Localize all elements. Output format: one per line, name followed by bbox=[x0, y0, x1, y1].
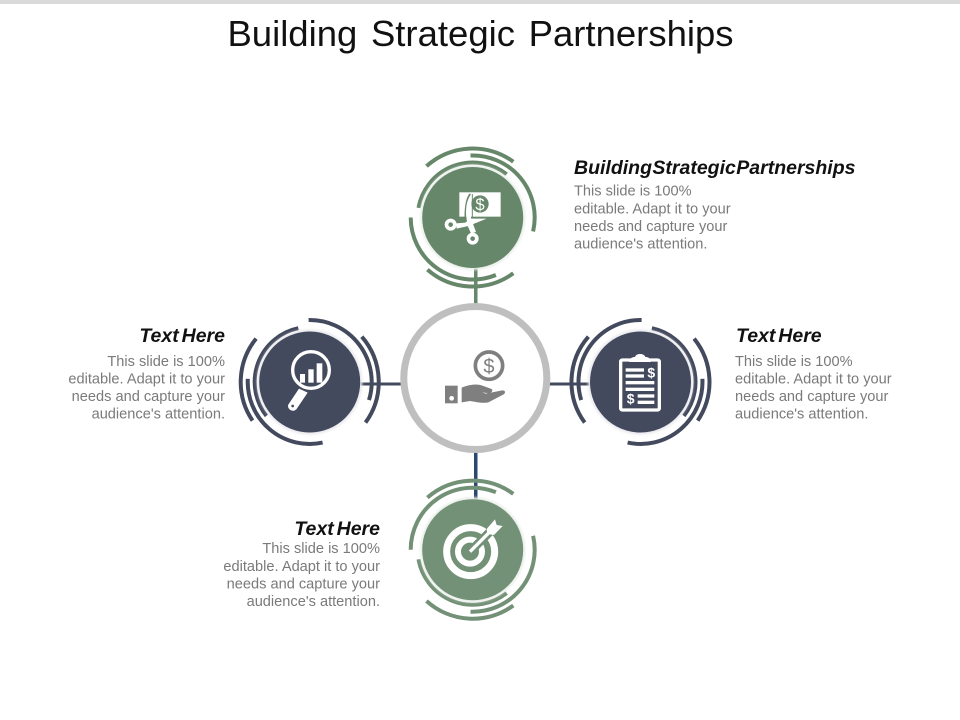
node: right navy bbox=[571, 320, 709, 444]
text block: bottom left: This slide is 100% bbox=[262, 541, 380, 557]
disc bbox=[257, 330, 362, 434]
connector: top bbox=[474, 266, 478, 306]
connector: right bbox=[547, 382, 593, 386]
text block: right: audience's attention. bbox=[735, 406, 868, 422]
arcs bbox=[411, 148, 535, 287]
text block: top right: Building Strategic Partnerships bbox=[574, 157, 856, 179]
text block: bottom left: needs and capture your bbox=[227, 576, 380, 592]
text block: top right bbox=[574, 157, 856, 252]
connector: left bbox=[358, 382, 404, 386]
text block: left: This slide is 100% bbox=[107, 354, 225, 370]
node: top green bbox=[411, 148, 535, 287]
arcs bbox=[241, 320, 379, 444]
text block: left bbox=[68, 325, 225, 422]
disc bbox=[420, 165, 525, 270]
text block: left: Text Here bbox=[139, 325, 225, 347]
top bar bbox=[0, 0, 960, 4]
icon: magnifier with bars bbox=[288, 352, 329, 411]
text block: right: editable. Adapt it to your bbox=[735, 372, 892, 388]
icon: hand holding coin bbox=[445, 352, 505, 403]
icon: clipboard with dollars: $ bbox=[627, 391, 635, 407]
text block: top right: This slide is 100% bbox=[574, 184, 692, 200]
text block: bottom left: editable. Adapt it to your bbox=[223, 559, 380, 575]
icon: clipboard with dollars bbox=[621, 354, 659, 410]
text block: bottom left: audience's attention. bbox=[247, 594, 380, 610]
disc bbox=[588, 330, 693, 434]
disc bbox=[420, 497, 525, 602]
text block: right: Text Here bbox=[736, 325, 822, 347]
text block: left: editable. Adapt it to your bbox=[68, 372, 225, 388]
text block: top right: needs and capture your bbox=[574, 219, 727, 235]
icon: clipboard with dollars: $ bbox=[647, 365, 655, 381]
text block: right: This slide is 100% bbox=[735, 354, 853, 370]
text block: bottom left: Text Here bbox=[294, 518, 380, 540]
node: left navy bbox=[241, 320, 379, 444]
arcs bbox=[411, 481, 535, 619]
connector: bottom bbox=[474, 448, 478, 500]
title: Building Strategic Partnerships bbox=[227, 13, 734, 54]
text block: top right: audience's attention. bbox=[574, 236, 707, 252]
text block: left: needs and capture your bbox=[72, 389, 225, 405]
central circle bbox=[404, 306, 547, 450]
arcs bbox=[571, 320, 709, 444]
text block: top right: editable. Adapt it to your bbox=[574, 202, 731, 218]
node: bottom green bbox=[411, 481, 535, 619]
icon: scissors cutting money: $ bbox=[475, 195, 485, 214]
text block: left: audience's attention. bbox=[92, 406, 225, 422]
icon: target with arrow bbox=[447, 519, 503, 576]
text block: right bbox=[735, 325, 892, 422]
text block: right: needs and capture your bbox=[735, 389, 888, 405]
icon: hand holding coin: $ bbox=[483, 356, 495, 378]
text block: bottom left bbox=[223, 518, 380, 610]
